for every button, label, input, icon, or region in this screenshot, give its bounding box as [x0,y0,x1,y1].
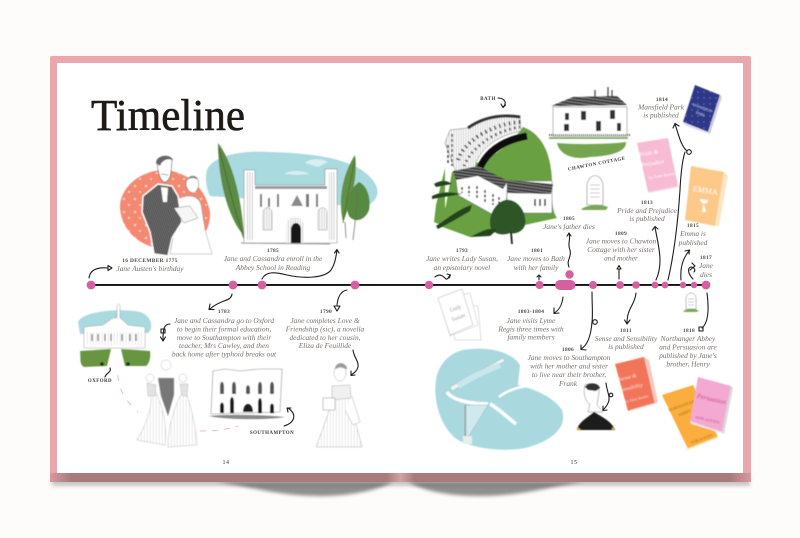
event: 1806: Frank [558,379,578,388]
arrow: 1805 [567,233,571,267]
event: 1813: 1813 [641,200,653,206]
event: 1806: with her mother and sister [530,362,608,370]
label: Bath: BATH [480,97,496,102]
event: 1806: to live near their brother, [532,370,606,379]
event: Jane Austen's birthday [116,258,184,273]
event: 1809: Jane moves to Chawton [586,236,657,246]
event: 1783: 1783 [218,309,230,315]
event: 1793: Jane writes Lady Susan, [426,254,498,263]
illustration: Oxford college [78,304,151,367]
arrow: Bath [498,98,506,108]
event: 1803-1804 [497,309,564,342]
arrow: 1815 [681,250,690,280]
event: 1803-1804: 1803-1804 [518,309,544,315]
illustration: Southampton ruin [209,369,285,419]
event: Jane Austen's birthday: Jane Austen's birthday [116,264,184,273]
event: 1809 [586,231,657,262]
event: 1811 [595,328,658,351]
illustration: Sense and Sensibility book: by Jane Austen [624,393,649,404]
event: 1785: 1785 [267,248,279,254]
event: 1803-1804: Regis three times with [497,324,564,334]
event: 1814: is published [643,110,679,120]
event: 1790: Eliza de Feuillide [298,341,352,350]
event: 1818: Northanger Abbey [660,334,716,343]
illustration: Pride and Prejudice book: Pride & [638,149,659,159]
illustration: Lady Susan letters: Susan [451,313,466,323]
arrow: 1818 [699,293,708,331]
event: 1783: to begin their formal education, [177,324,271,334]
event: 1783: back home after typhoid breaks out [172,350,277,358]
arrow: 1801 [537,275,541,280]
illustration: Emma book [685,166,728,226]
event: 1793: 1793 [456,248,468,254]
event: 1803-1804: family members [507,332,555,342]
arrow: 1811 [624,293,636,324]
illustration: Northanger Abbey book [662,385,718,450]
illustration: Lady Susan letters [438,289,481,340]
event: 1785: Jane and Cassandra enroll in the [224,254,323,263]
label: Oxford: OXFORD [88,379,112,384]
event: 1814: Mansfield Park [637,102,685,112]
event: 1813 [616,200,678,223]
event: 1801: 1801 [531,248,543,254]
event: 1790: dedicated to her cousin, [289,333,361,342]
event: 1809: 1809 [615,231,627,237]
arrow: Lady Susan [435,274,450,279]
event: 1801: Jane moves to Bath [507,254,565,263]
event: 1818 [658,328,718,368]
illustration: Persuasion book [690,377,733,434]
event: 1790: Friendship (sic), a novella [285,324,365,334]
illustration: Persuasion book: Persuasion [695,393,726,406]
illustration: Jane with a book [316,363,362,447]
illustration: Frank portrait [577,383,615,430]
arrow: Southampton [284,408,294,426]
event: 1783: Jane and Cassandra go to Oxford [174,316,274,325]
event: 1785 [224,248,323,272]
book cover [50,56,751,482]
arrow: Oxford label [105,368,110,377]
event: 1817: 1817 [700,255,712,261]
event: 1811: is published [608,342,644,351]
illustration: Sense and Sensibility book: Sense & [618,373,638,383]
illustration: Mansfield Park book: PARK [695,111,706,118]
illustration: Emma book: EMMA [692,184,719,197]
title: Timeline [91,91,245,140]
page number 15: 15 [570,460,578,466]
illustration: Sense and Sensibility book: Sensibility [620,382,644,394]
timeline axis with event dots [87,270,710,290]
arrow: 1806 [581,292,597,350]
illustration: shoe on blue blob [435,349,563,450]
label: Southampton: SOUTHAMPTON [250,431,294,436]
arrow: 1790 [334,290,347,311]
arrow: move to Oxford [160,324,170,341]
event: 1790 [285,309,365,350]
event: 1790: Jane completes Love & [290,316,360,325]
arrow: birthday [89,266,112,278]
event: 1790: 1790 [320,309,332,315]
event: 1801 [507,248,565,272]
book shadow [52,476,750,496]
arrow: 1803-1804 [554,297,563,314]
event: 1818: published by Jane's [658,351,717,360]
arrow: 1783 [209,294,232,310]
arrow: 1809 [617,266,621,279]
illustration: Pride and Prejudice book: Prejudice [640,159,665,169]
page number 14: 14 [222,460,230,466]
event: 1814 [637,97,685,120]
event: 1785: Abbey School in Reading [235,263,311,272]
event: 1805 [543,216,595,231]
event: 1811: Sense and Sensibility [595,334,658,343]
illustration: Mansfield Park book: MANSFIELD [692,103,713,114]
event: 1811: 1811 [620,328,632,334]
event: 1801: with her family [514,263,559,272]
event: 1783 [172,309,277,358]
event: 1809: Cottage with her sister [587,245,655,254]
arrow: 1813 [652,226,660,280]
illustration: Mansfield Park book [683,85,722,134]
event: 1814: 1814 [656,97,668,103]
event: 1806: 1806 [562,347,574,353]
dashed route: Oxford to Southampton [118,375,238,431]
event: 1806: Jane moves to Southampton [528,353,611,362]
event: 1806 [528,347,611,388]
illustration: Bath Royal Crescent [432,116,557,244]
event: 1793: an epistolary novel [434,263,490,272]
arrow: 1817 [689,263,695,279]
event: 1783: teacher, Mrs Cawley, and then [179,341,269,350]
illustration: Northanger Abbey book: ABBEY [677,408,692,417]
illustration: Abbey School with trees [206,143,377,244]
illustration: Northanger Abbey book: JANE AUSTEN [690,433,714,445]
event: 1815 [678,223,708,247]
arrow: 1814 [668,124,691,280]
event: 1815: 1815 [687,223,699,229]
event: 1803-1804: Jane visits Lyme [507,316,556,325]
arrow: Jane portrait [351,350,358,376]
illustration: small gravestone [683,293,699,312]
event: 1809: and mother [604,254,638,262]
illustration: Chawton Cottage [549,87,630,158]
illustration: Austen parents with baby [120,156,212,256]
event: 1815: Emma is [679,229,706,238]
event: 1805: Jane's father dies [543,222,595,231]
event: 1817: Jane [699,261,714,270]
illustration: Sense and Sensibility book [615,357,658,411]
arrow: Frank [603,383,613,410]
event: 1783: move to Southampton with their [177,333,271,342]
event: Jane Austen's birthday: 16 DECEMBER 1775 [122,258,178,264]
event: 1817 [699,255,714,279]
event: 1793 [426,248,498,272]
event: 1818: brother, Henry [666,360,710,368]
illustration: Lady Susan letters: Lady [448,304,463,314]
event: 1818: 1818 [683,328,695,334]
event: 1813: Pride and Prejudice [616,206,678,215]
event: 1818: and Persuasion are [659,342,718,352]
illustration: Pride and Prejudice book [637,138,680,193]
illustration: three women in gowns [137,360,197,447]
label: Chawton Cottage: CHAWTON COTTAGE [568,156,626,173]
illustration: Persuasion book: JANE AUSTEN [695,415,720,425]
open page spread [57,63,743,473]
event: 1813: is published [629,214,665,223]
illustration: Pride and Prejudice book: by Jane Austen [648,171,676,180]
event: 1805: 1805 [563,216,575,222]
arrow: Abbey School [262,250,339,279]
event: 1815: published [678,238,708,247]
illustration: gravestone [581,176,608,210]
event: 1817: dies [700,270,712,279]
illustration: Northanger Abbey book: NORTHANGER [668,398,695,413]
